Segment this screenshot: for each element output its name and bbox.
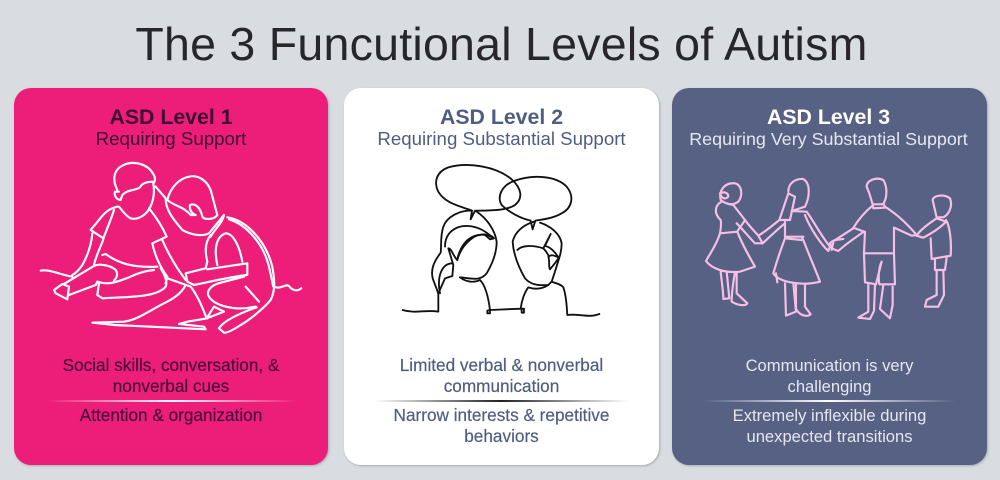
text: attention: Attention & organization	[80, 405, 262, 425]
text: limited communication: Limited verbal & nonverbal	[400, 355, 603, 375]
text: narrow interests	[394, 405, 609, 446]
text: limited communication: communication	[444, 376, 559, 396]
figure: boy 1	[830, 179, 917, 319]
figure: girl 2	[758, 179, 830, 316]
text: communication challenging: Communication is very	[746, 356, 913, 375]
heading: ASD Level 1: ASD Level 1	[109, 105, 233, 129]
text: social skills	[63, 355, 280, 396]
panel: ASD Level 1	[14, 88, 328, 465]
heading: ASD Level 3: ASD Level 3	[767, 105, 890, 129]
text: social skills: nonverbal cues	[113, 376, 229, 396]
text: narrow interests: Narrow interests & repetitive	[394, 405, 609, 425]
icon: two children sitting line drawing	[41, 163, 301, 333]
text: communication challenging	[746, 356, 914, 396]
text: communication challenging: challenging	[788, 377, 871, 396]
figure: boy 2	[917, 196, 951, 307]
icon: four children holding hands line drawing	[706, 179, 951, 319]
text: inflexible	[733, 406, 926, 446]
divider	[47, 400, 297, 402]
figure: girl 1	[706, 183, 763, 305]
subheading: Requiring Substantial Support: Requiring Substantial Support	[377, 128, 626, 149]
divider	[702, 400, 956, 402]
heading: ASD Level 2: ASD Level 2	[440, 105, 563, 129]
text: narrow interests: behaviors	[464, 426, 539, 446]
title: The 3 Funcutional Levels of Autism	[135, 18, 868, 70]
icon: two heads with speech bubbles line drawing	[403, 165, 599, 316]
divider	[374, 400, 628, 402]
subheading: Requiring Support: Requiring Support	[96, 128, 246, 149]
text: inflexible: unexpected transitions	[746, 427, 913, 446]
text: limited communication	[400, 355, 603, 396]
text: inflexible: Extremely inflexible during	[733, 406, 926, 425]
text: social skills: Social skills, conversation, &	[63, 355, 279, 375]
panel: ASD Level 3	[672, 88, 987, 465]
subheading: Requiring Very Substantial Support: Requiring Very Substantial Support	[689, 129, 968, 149]
panel: ASD Level 2	[344, 88, 659, 465]
